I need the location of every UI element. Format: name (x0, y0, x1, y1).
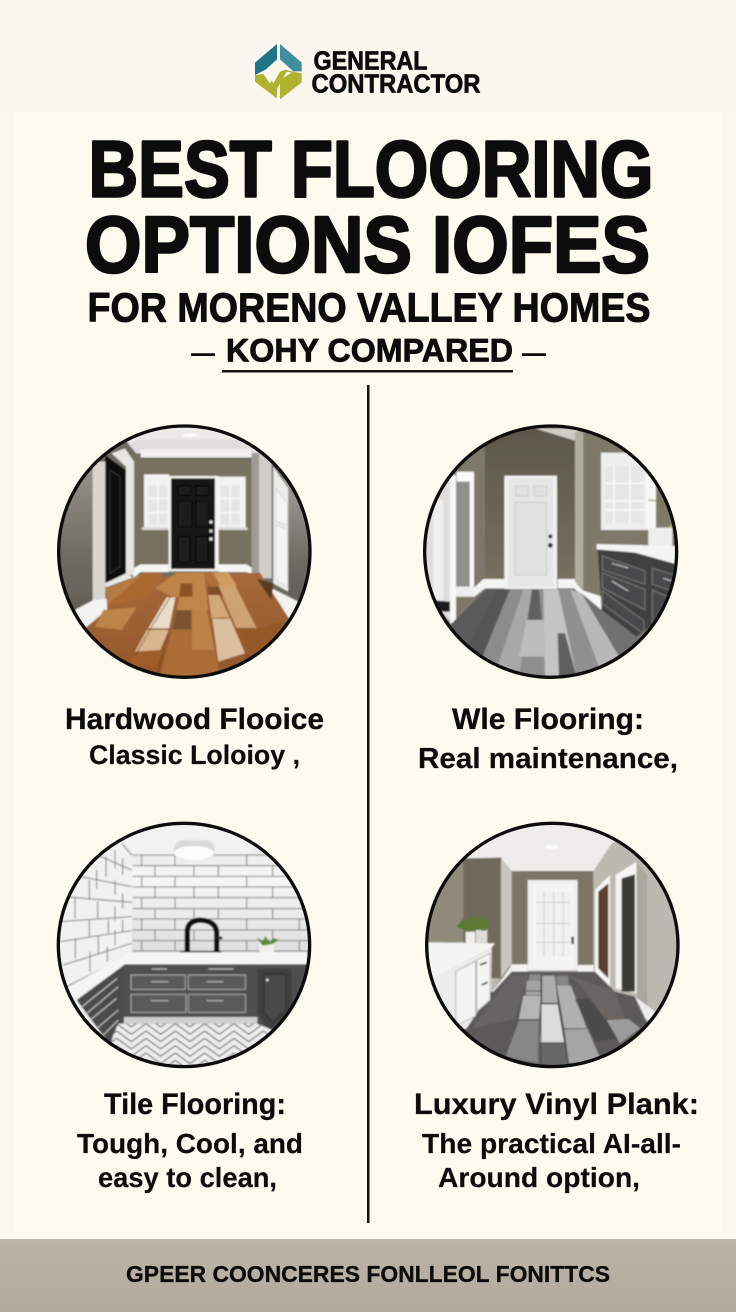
center divider (367, 385, 370, 1223)
footer bar (0, 1239, 736, 1312)
tagline with underline: — (191, 337, 215, 368)
logo wordmark: GENERAL (314, 46, 428, 76)
label: hardwood (65, 703, 324, 770)
title (85, 124, 654, 289)
subtitle: FOR MORENO VALLEY HOMES (88, 284, 650, 330)
label: luxury vinyl plank (414, 1088, 699, 1193)
label: tile flooring: Tough, Cool, and (77, 1128, 303, 1159)
title: OPTIONS IOFES (85, 200, 650, 289)
label: hardwood: Hardwood Flooice (65, 703, 324, 736)
photo: grey plank hallway (423, 424, 678, 679)
label: wle flooring: Real maintenance, (418, 743, 678, 775)
title: BEST FLOORING (88, 124, 654, 214)
logo wordmark: CONTRACTOR (312, 68, 481, 98)
label: tile flooring: easy to clean, (98, 1162, 277, 1193)
footer text: GPEER COONCERES FONLLEOL FONITTCS (126, 1261, 610, 1287)
label: tile flooring: Tile Flooring: (104, 1088, 286, 1121)
photo: grey plank corridor (425, 822, 680, 1068)
label: hardwood: Classic Loloioy , (89, 740, 300, 770)
label: wle flooring: Wle Flooring: (452, 703, 644, 736)
label: tile flooring (77, 1088, 303, 1193)
label: luxury vinyl plank: Around option, (438, 1162, 640, 1193)
logo wordmark (312, 46, 481, 98)
photo: white subway tile kitchen (56, 822, 312, 1068)
label: luxury vinyl plank: The practical AI-all- (422, 1128, 681, 1159)
panel: wle flooring (415, 420, 685, 775)
panel: luxury vinyl plank (414, 815, 699, 1193)
label: wle flooring (418, 703, 678, 775)
icon: logo mark (255, 44, 302, 99)
tagline with underline: — (522, 337, 546, 368)
tagline with underline: KOHY COMPARED (226, 332, 513, 368)
photo: hardwood hallway (57, 424, 312, 679)
label: luxury vinyl plank: Luxury Vinyl Plank: (414, 1088, 699, 1121)
panel: tile flooring (50, 815, 320, 1193)
logo: General Contractor (255, 44, 481, 99)
panel: hardwood flooring (50, 420, 324, 770)
